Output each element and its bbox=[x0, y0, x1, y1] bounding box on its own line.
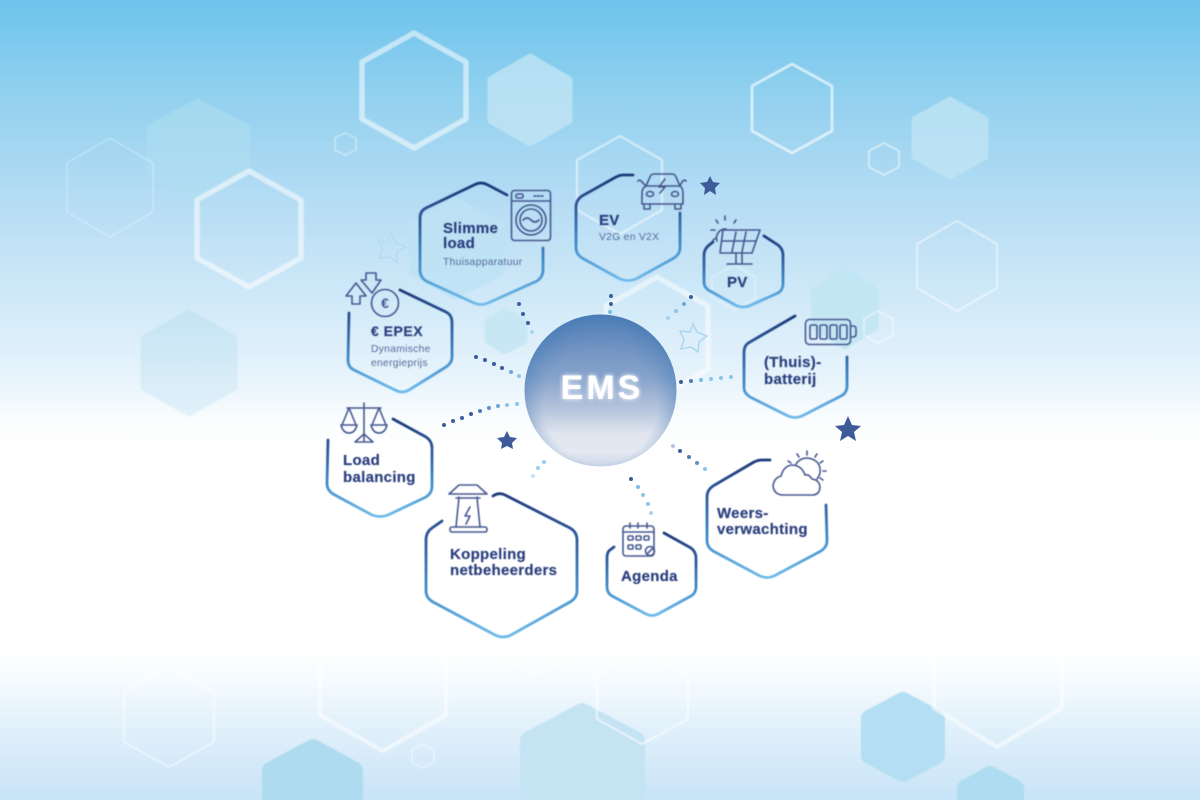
icon: electric car bbox=[638, 174, 686, 209]
panel: EPEX: Dynamische bbox=[371, 344, 431, 355]
background hexagon pattern bbox=[67, 33, 997, 414]
panel: EV: V2G en V2X bbox=[599, 232, 659, 243]
panel: (Thuis)-batterij bbox=[744, 316, 856, 418]
panel: (Thuis)-batterij: (Thuis)- bbox=[764, 354, 821, 371]
panel: EV: EV bbox=[599, 212, 620, 229]
panel: PV bbox=[704, 216, 783, 307]
icon: battery bbox=[806, 320, 856, 344]
panel: Weersverwachting: verwachting bbox=[717, 521, 808, 538]
connector dots bbox=[442, 294, 733, 515]
icon: washing machine bbox=[512, 190, 550, 240]
bottom hexagon pattern bbox=[123, 692, 1064, 800]
icon: scales bbox=[341, 403, 387, 442]
panel: Slimme load: load bbox=[443, 235, 475, 252]
icon: transmission tower bbox=[449, 485, 487, 532]
panel: Slimme load: Thuisapparatuur bbox=[443, 257, 523, 268]
panel: EPEX: energieprijs bbox=[371, 358, 428, 369]
panel: PV: PV bbox=[727, 274, 748, 291]
icon: calendar bbox=[623, 523, 654, 556]
panel: Weersverwachting bbox=[707, 451, 827, 578]
panel: Koppeling netbeheerders: netbeheerders bbox=[450, 562, 557, 579]
panel: Load balancing: balancing bbox=[343, 469, 416, 486]
icon: cloud and sun bbox=[773, 451, 826, 495]
panel: EV bbox=[576, 174, 686, 280]
stars bbox=[378, 176, 861, 449]
panel: Load balancing: Load bbox=[343, 452, 380, 469]
panel: EPEX bbox=[346, 273, 452, 392]
EMS label: EMS bbox=[561, 369, 643, 407]
panel: Weersverwachting: Weers- bbox=[717, 505, 769, 522]
panel: Koppeling netbeheerders bbox=[426, 485, 577, 637]
panel: EPEX: € EPEX bbox=[371, 323, 423, 339]
EMS label: EMS bbox=[561, 369, 643, 407]
icon: solar panel bbox=[711, 216, 760, 264]
panel: Agenda: Agenda bbox=[621, 568, 678, 585]
EMS sphere bbox=[524, 314, 676, 466]
panel: Koppeling netbeheerders: Koppeling bbox=[450, 546, 526, 563]
panel: Agenda bbox=[607, 523, 696, 616]
icon: price arrows and euro: € bbox=[381, 295, 389, 311]
panel: (Thuis)-batterij: batterij bbox=[764, 371, 816, 388]
panel: Load balancing bbox=[327, 403, 432, 516]
panel: Slimme load: Slimme bbox=[443, 220, 498, 237]
panel: Slimme load bbox=[420, 183, 550, 304]
